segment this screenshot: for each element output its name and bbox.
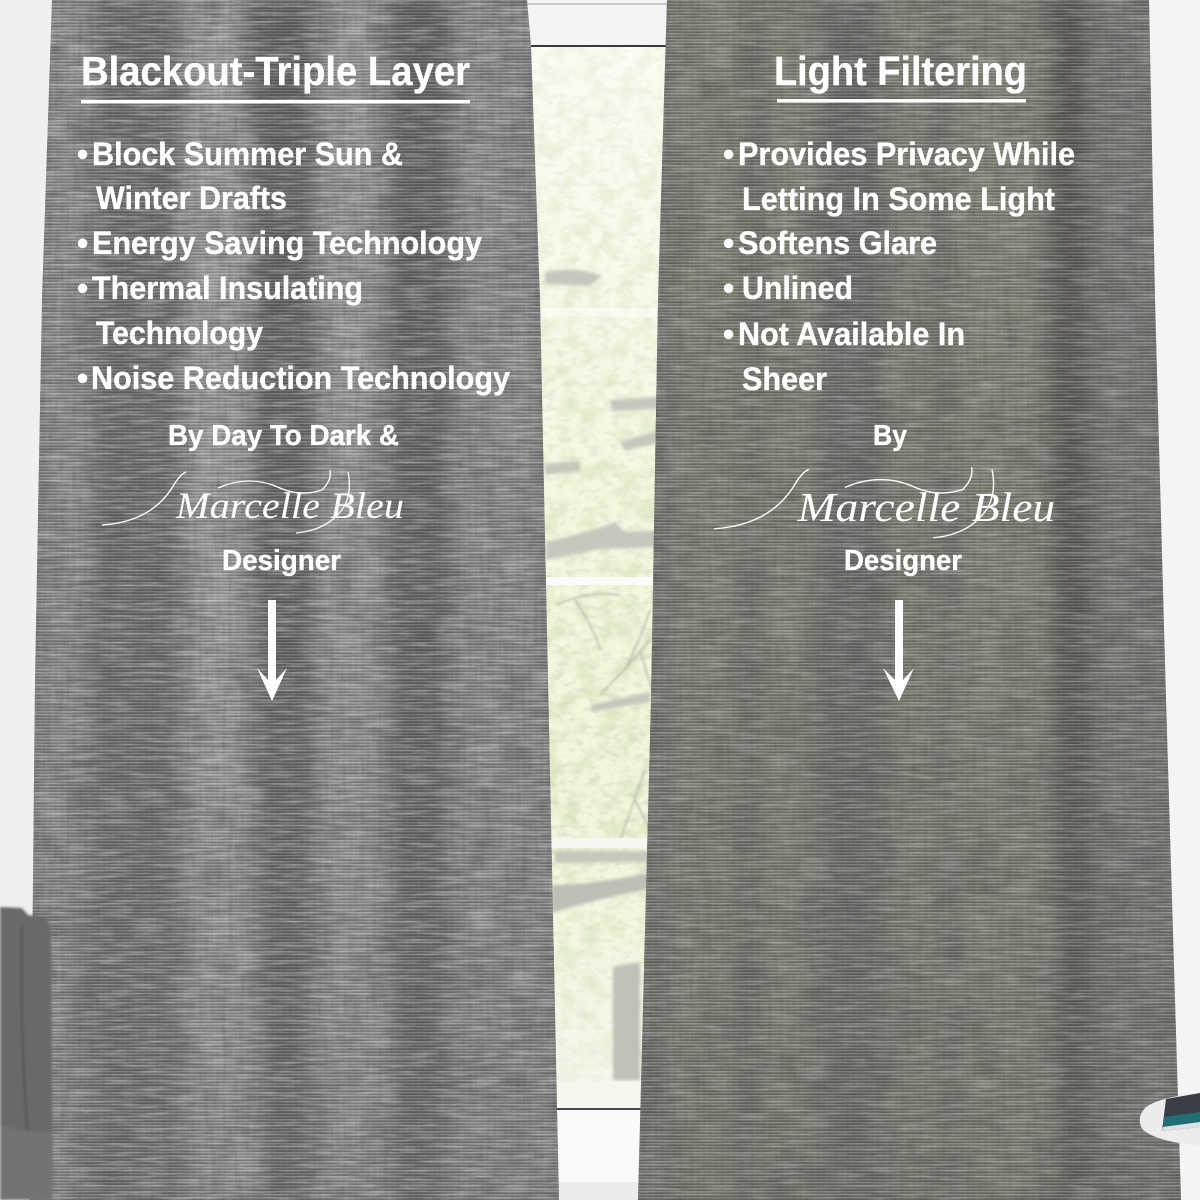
arrow pointing down: [257, 600, 287, 701]
label: Designer: Designer: [222, 545, 341, 577]
feature list: [77, 136, 510, 396]
feature list: •: [723, 316, 734, 352]
feature list: •: [723, 225, 734, 261]
feature list: Thermal Insulating: [92, 270, 363, 306]
sofa arm at lower left: [0, 907, 53, 1200]
window with garden view: [527, 3, 667, 1184]
feature list: [723, 136, 1075, 397]
signature: Marcelle Bleu: Marcelle Bleu: [175, 486, 404, 527]
panel: blackout features: [77, 48, 510, 701]
feature list: Letting In Some Light: [742, 181, 1055, 217]
feature list: Technology: [96, 315, 263, 351]
feature list: Winter Drafts: [96, 180, 287, 216]
feature list: •: [77, 136, 88, 172]
signature: Marcelle Bleu: [102, 470, 404, 533]
heading underline: [81, 100, 470, 104]
feature list: Provides Privacy While: [738, 136, 1075, 172]
byline: By Day To Dark &: [168, 420, 399, 452]
arrow pointing down: [883, 600, 914, 701]
feature list: •: [723, 270, 734, 306]
feature list: •: [77, 360, 88, 396]
heading: Blackout-Triple Layer: Blackout-Triple Layer: [81, 48, 470, 94]
feature list: •: [77, 225, 88, 261]
panel: light filtering features: [714, 48, 1075, 701]
byline: By: [873, 420, 907, 452]
feature list: Noise Reduction Technology: [91, 360, 510, 396]
heading underline: [777, 99, 1026, 102]
label: Designer: Designer: [844, 545, 962, 577]
side table with magazine at lower right: [1140, 1093, 1200, 1145]
panel: left curtain fabric: [30, 0, 559, 1200]
feature list: Not Available In: [738, 316, 965, 352]
feature list: Block Summer Sun &: [92, 136, 403, 172]
heading: Light Filtering: Light Filtering: [774, 48, 1027, 94]
feature list: Unlined: [742, 270, 853, 306]
feature list: •: [723, 136, 734, 172]
signature: Marcelle Bleu: Marcelle Bleu: [796, 485, 1055, 531]
feature list: •: [77, 270, 88, 306]
signature: Marcelle Bleu: [714, 467, 1055, 538]
feature list: Sheer: [742, 361, 827, 397]
panel: right curtain fabric: [620, 0, 1200, 1200]
feature list: Energy Saving Technology: [92, 225, 482, 261]
feature list: Softens Glare: [738, 225, 937, 261]
